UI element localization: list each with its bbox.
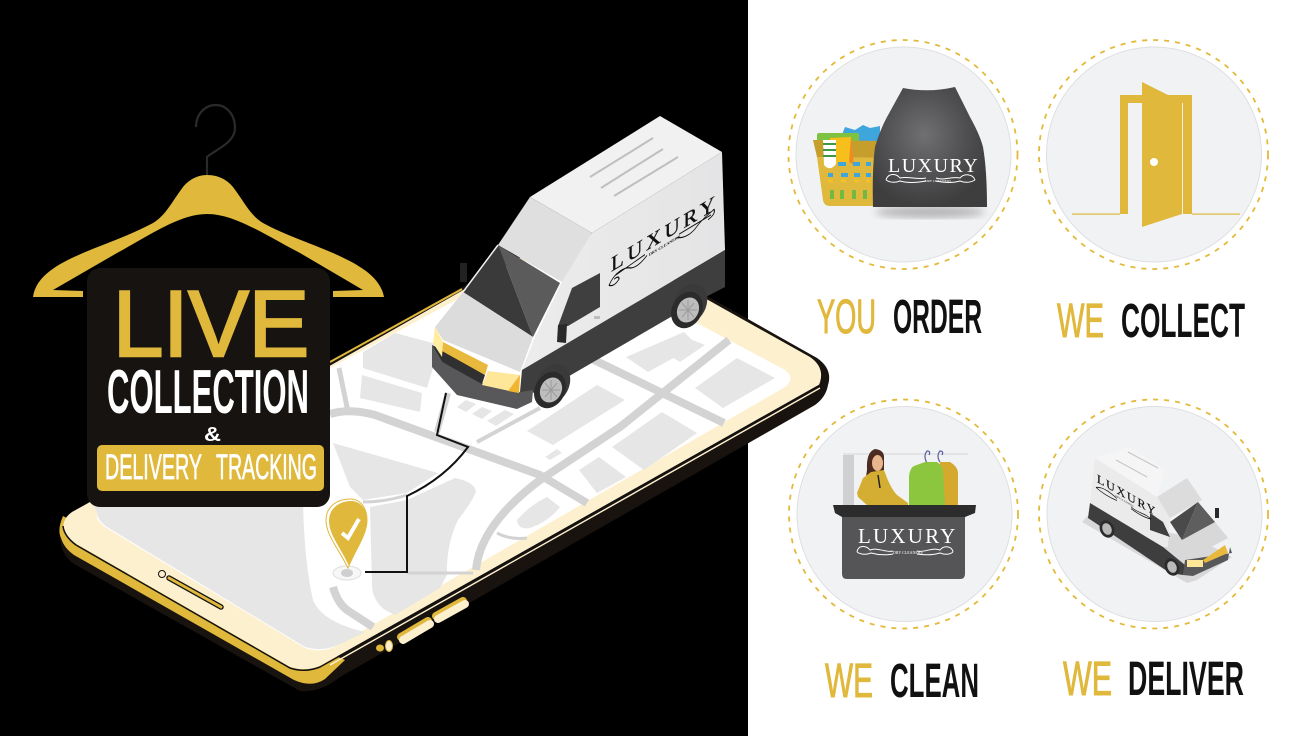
step: we collect	[1039, 40, 1268, 348]
dashed ring	[1039, 40, 1268, 269]
gold strip	[442, 342, 488, 375]
route line	[365, 393, 468, 572]
delivery van	[432, 116, 725, 414]
hood	[435, 292, 533, 372]
phone cream frame	[63, 226, 821, 669]
label: we deliver	[1063, 653, 1244, 706]
left headlight	[433, 327, 443, 357]
roof lines	[590, 138, 678, 196]
icon: reception counter	[833, 505, 976, 579]
icon: branded bag: DRY CLEANERS	[925, 179, 951, 183]
hanger hook	[196, 105, 235, 175]
phone with map	[59, 222, 829, 691]
title sign with hanger	[33, 105, 384, 507]
step: you order	[788, 40, 1018, 344]
map roads	[330, 340, 729, 627]
side mirror	[557, 324, 567, 343]
dashed ring	[1039, 400, 1268, 628]
step: we clean	[789, 400, 1018, 708]
icon: laundry basket	[813, 125, 880, 206]
tracking pill	[97, 445, 324, 491]
phone speaker	[158, 570, 221, 607]
front wheel	[528, 358, 577, 414]
icon: reception counter: LUXURY	[858, 524, 958, 548]
heading LIVE: LIVE	[113, 271, 309, 376]
circle background	[1046, 47, 1262, 262]
van roof	[530, 116, 722, 233]
sign box	[87, 268, 330, 507]
rear wheel	[665, 278, 714, 334]
windshield	[463, 245, 533, 337]
heading DELIVERY TRACKING: TRACKING	[216, 448, 317, 487]
icon: van shadow	[1082, 513, 1232, 583]
step: we deliver	[1039, 400, 1268, 706]
van lower band	[520, 250, 725, 393]
phone screen	[97, 247, 790, 650]
van logo: LUXURY	[611, 189, 718, 277]
map blocks	[90, 332, 775, 649]
black background panel	[0, 0, 748, 736]
icon: attendant	[857, 449, 908, 506]
phone side buttons	[376, 601, 465, 652]
van side	[522, 152, 725, 370]
phone shadow body	[60, 222, 829, 691]
ampersand: &	[204, 424, 221, 446]
heading COLLECTION: COLLECTION	[107, 358, 309, 427]
circle background	[797, 406, 1012, 622]
right headlight	[482, 371, 520, 393]
icon: open door	[1072, 82, 1240, 227]
label: you order	[817, 291, 982, 344]
circle background	[1047, 406, 1262, 622]
location pin	[326, 499, 367, 580]
label: we clean: WE	[825, 655, 873, 708]
heading DELIVERY TRACKING: DELIVERY	[105, 448, 202, 487]
dashed ring	[789, 400, 1018, 628]
dashed ring	[788, 40, 1018, 269]
label: you order: ORDER	[893, 291, 982, 344]
phone gold edge	[59, 516, 345, 684]
far mirror	[460, 263, 467, 282]
van cab top	[498, 197, 592, 282]
door handle	[594, 316, 600, 319]
label: we clean	[825, 655, 979, 708]
label: we collect	[1057, 295, 1245, 348]
icon: reception counter: DRY CLEANERS	[893, 550, 923, 555]
small van logo: DRY CLEANERS	[1115, 495, 1134, 508]
label: we collect: WE	[1057, 295, 1104, 348]
small van logo: LUXURY	[1097, 471, 1157, 519]
van logo: DRY CLEANERS	[649, 234, 681, 257]
icon: small van	[1088, 447, 1232, 578]
label: you order: YOU	[817, 291, 876, 344]
front bumper	[432, 345, 533, 409]
label: we clean: CLEAN	[890, 655, 979, 708]
icon: garment bags	[909, 451, 958, 505]
icon: branded bag	[873, 87, 987, 218]
icon: clothes rack	[843, 453, 968, 507]
circle background	[796, 47, 1011, 262]
hanger body	[33, 175, 384, 297]
label: we deliver: WE	[1063, 653, 1112, 706]
grille	[432, 345, 485, 384]
side window	[558, 273, 600, 326]
icon: branded bag: LUXURY	[888, 155, 979, 177]
